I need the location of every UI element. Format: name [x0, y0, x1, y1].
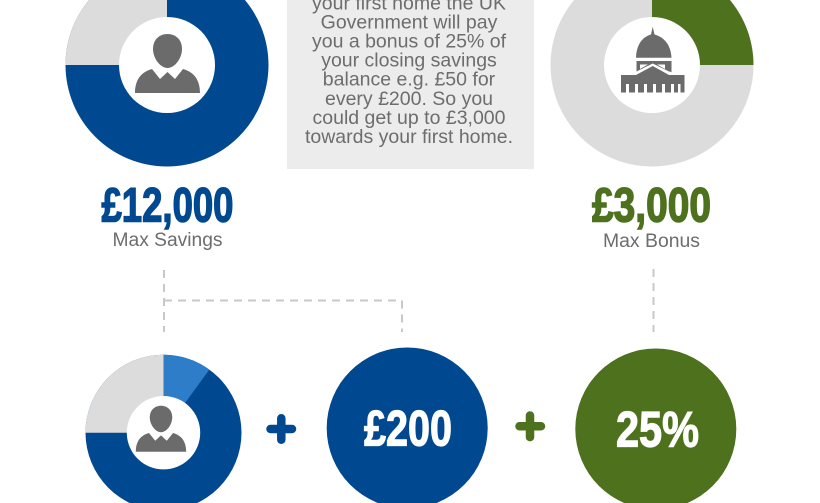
text block: bonus explanation: every £200. So you — [325, 88, 493, 110]
label: max bonus: Max Bonus — [603, 231, 700, 252]
panel: £200 circle: £200 — [364, 400, 452, 456]
heading: max bonus amount: £3,000 — [592, 180, 711, 232]
panel: 25% circle: 25% — [616, 402, 699, 458]
text block: bonus explanation: you a bonus of 25% of — [312, 30, 507, 52]
panel: max savings donut — [66, 0, 268, 166]
text block: bonus explanation: could get up to £3,000 — [312, 107, 506, 129]
icon: blue plus — [270, 418, 292, 440]
icon: person small — [136, 406, 186, 452]
heading: max savings amount: £12,000 — [102, 180, 234, 232]
panel: max bonus donut — [550, 0, 754, 166]
panel: £200 circle — [327, 348, 488, 503]
text block: bonus explanation: towards your first home. — [305, 126, 513, 148]
text block: bonus explanation — [287, 0, 534, 169]
icon: government dome building — [621, 27, 684, 93]
panel: savings progress donut — [86, 355, 242, 503]
text block: bonus explanation: Government will pay — [321, 12, 498, 34]
icon: green plus — [520, 416, 541, 437]
connector: bonus to percentage — [652, 269, 654, 332]
text block: bonus explanation: your closing savings — [321, 50, 497, 72]
panel: 25% circle — [575, 348, 736, 503]
connector: savings to monthly deposit — [164, 270, 402, 332]
icon: person — [135, 34, 200, 93]
text block: bonus explanation: balance e.g. £50 for — [323, 68, 496, 90]
label: max savings: Max Savings — [112, 230, 222, 251]
